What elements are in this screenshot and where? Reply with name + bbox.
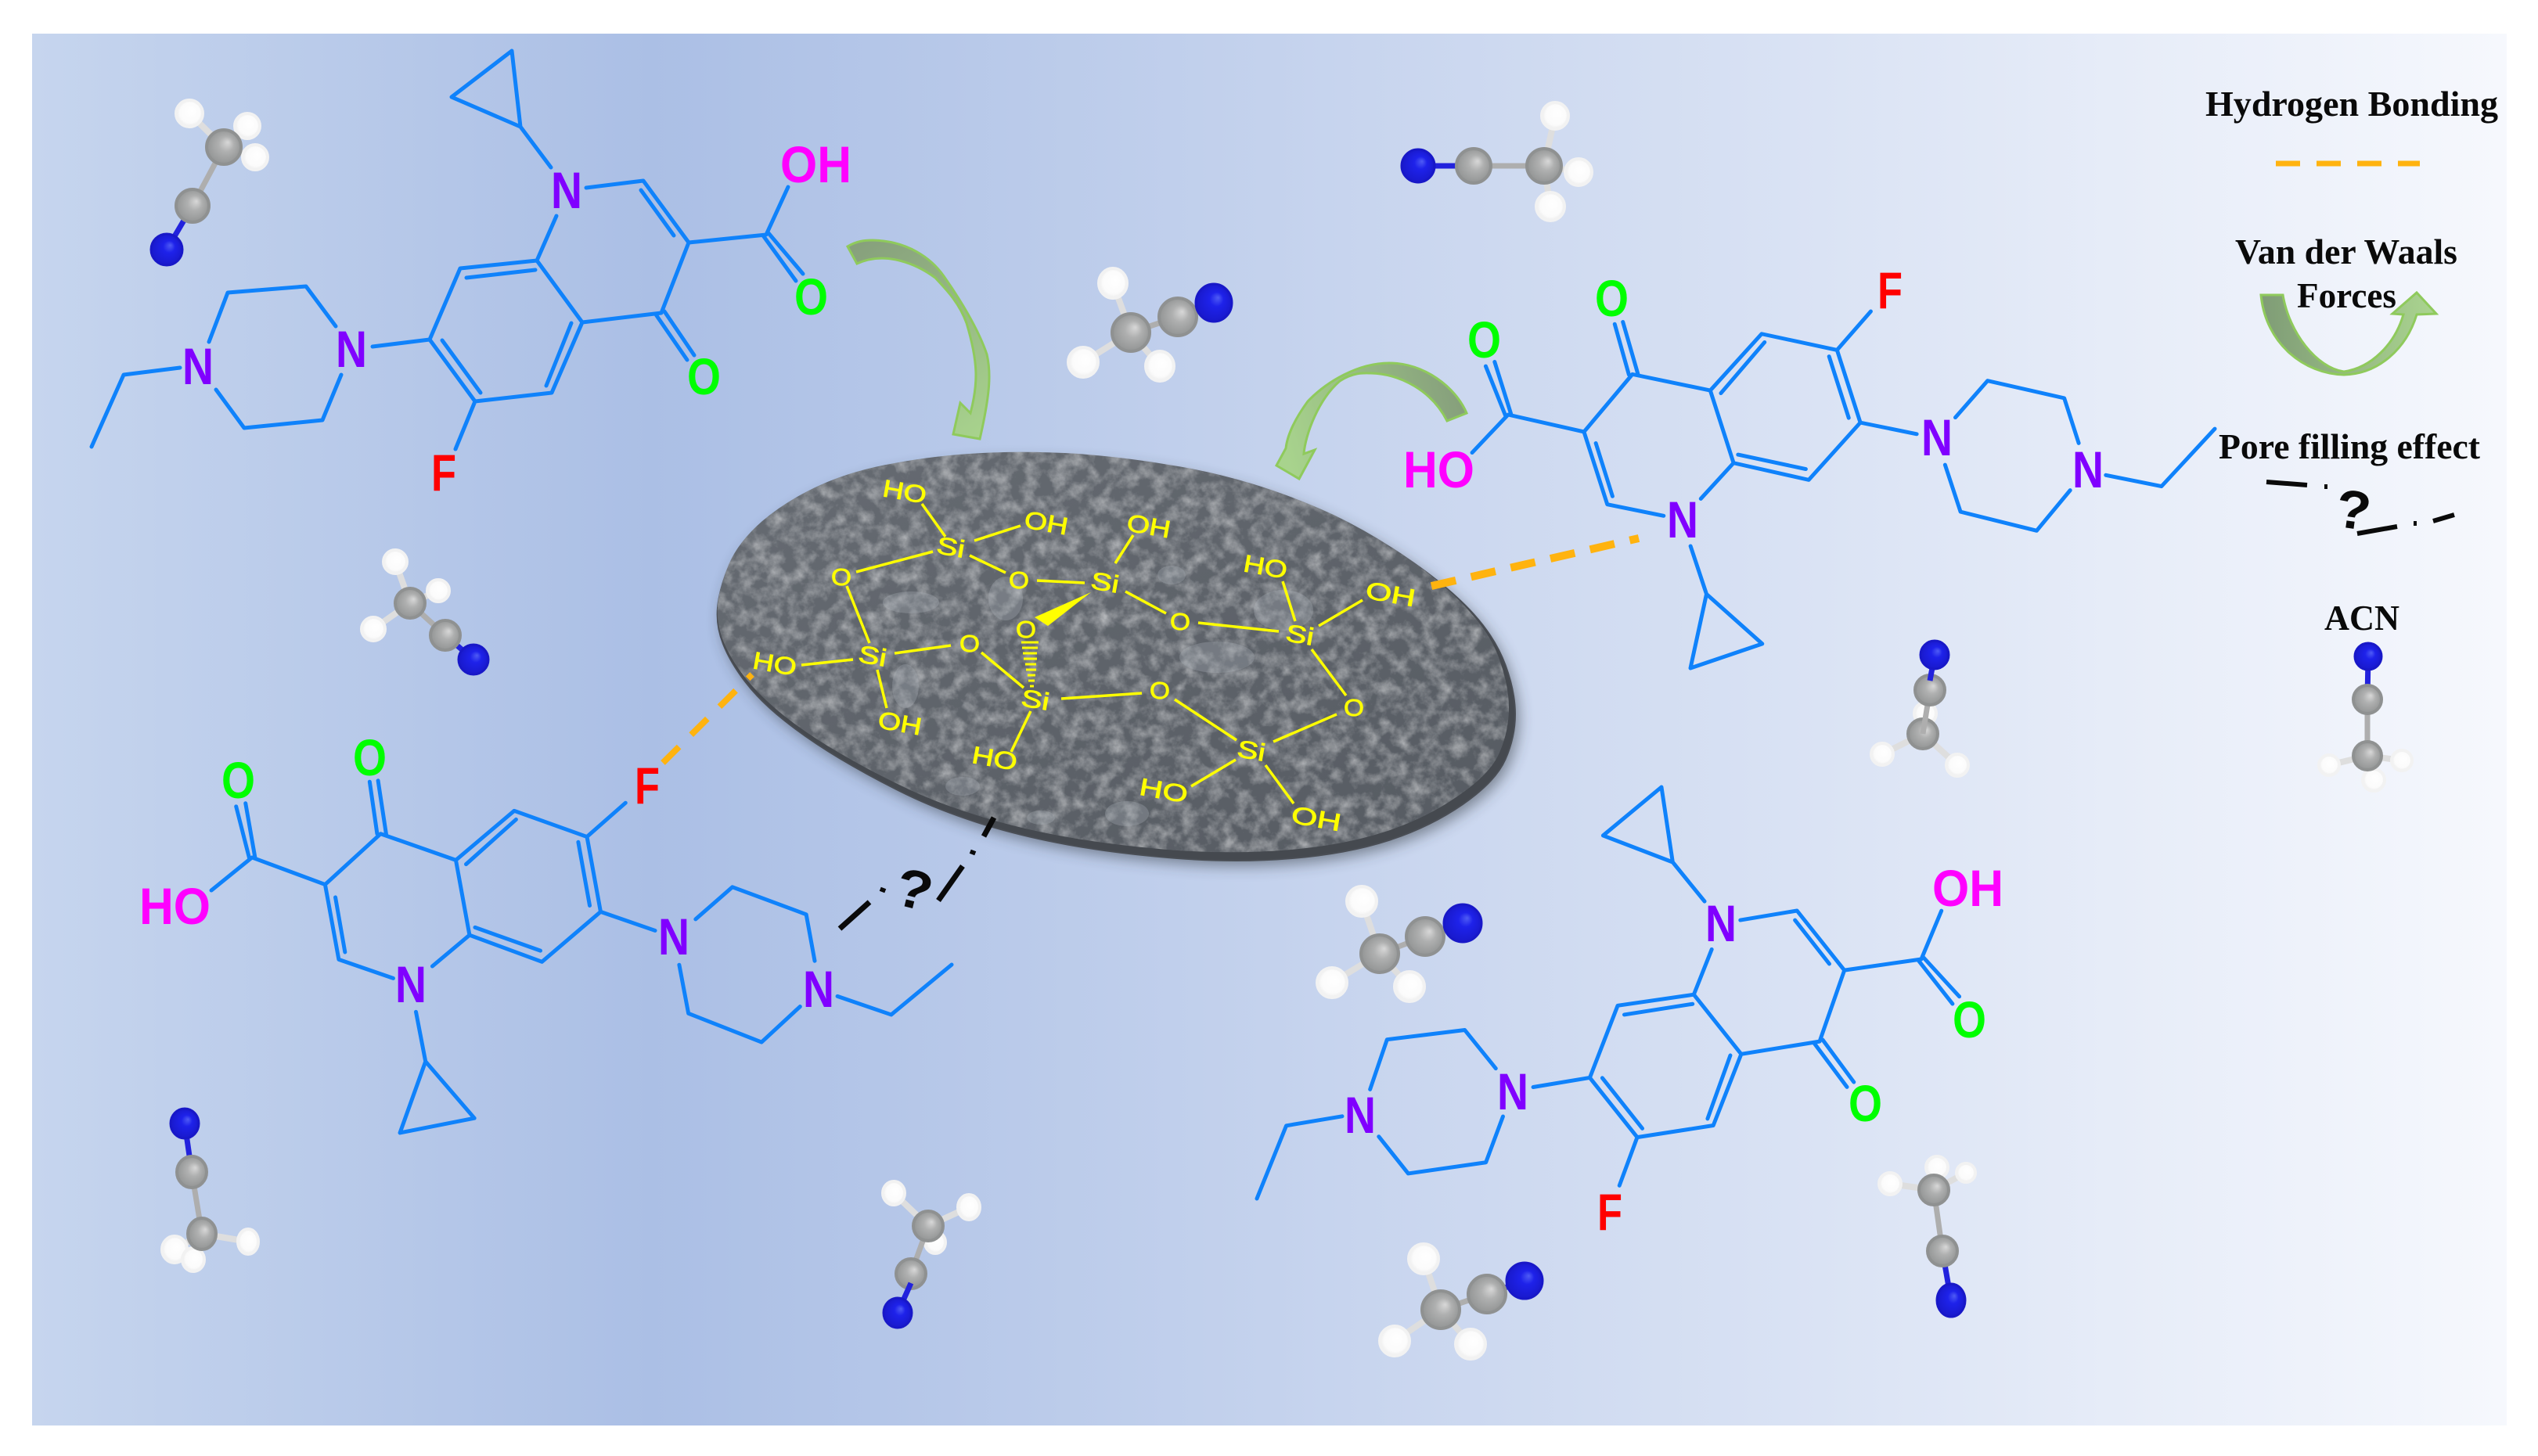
atom labels: N [1705, 894, 1737, 952]
legend sample: ACN molecule [2319, 643, 2412, 791]
ACN molecule 1 [151, 100, 268, 265]
yellow atom labels: Si [1019, 684, 1052, 716]
ACN molecule 10 [883, 1181, 980, 1328]
yellow atom labels: HO [1241, 549, 1290, 584]
yellow atom labels: O [1150, 677, 1170, 704]
bonds [1415, 201, 2216, 801]
legend sample: dash-dot with question mark: ? [2332, 478, 2374, 543]
legend heading: ACN: ACN [2324, 598, 2399, 638]
atom labels [1345, 859, 2003, 1241]
yellow hashed bond [1021, 642, 1039, 686]
ACN molecule 6 [1317, 886, 1481, 1001]
bonds [92, 51, 803, 449]
yellow atom labels: O [831, 563, 851, 591]
molecule: top-right drug [1403, 201, 2216, 801]
atom labels: N [1497, 1062, 1528, 1120]
legend heading: pore filling effect: Pore filling effect [2219, 426, 2481, 466]
legend heading: van der Waals: Van der Waals [2235, 232, 2457, 271]
yellow atom labels: O [959, 630, 980, 657]
atom labels: N [395, 955, 427, 1013]
yellow atom labels: Si [1089, 566, 1121, 599]
ACN molecule 2 [1402, 102, 1592, 221]
atom labels: F [1877, 261, 1903, 319]
atom labels: N [803, 960, 834, 1018]
atom labels: O [353, 728, 387, 786]
legend heading: van der Waals [2235, 232, 2457, 315]
yellow atom labels: OH [1022, 505, 1071, 541]
atom labels: F [635, 757, 660, 814]
question mark: ? [889, 856, 939, 923]
atom labels [1403, 261, 2104, 548]
ACN molecule 5 [1871, 641, 1968, 776]
yellow atom labels: O [1344, 694, 1364, 721]
yellow atom labels: OH [1363, 577, 1417, 612]
yellow atom labels [751, 474, 1417, 836]
yellow atom labels: Si [1283, 619, 1316, 651]
atom labels: N [182, 337, 214, 395]
ACN molecule 3 [1068, 268, 1232, 381]
yellow silanol structure bonds [801, 504, 1363, 803]
ACN molecule 9 [162, 1109, 258, 1271]
atom labels: O [1953, 990, 1986, 1048]
yellow atom labels: Si [1235, 735, 1268, 767]
atom labels: O [1467, 311, 1501, 368]
atom labels: N [1921, 408, 1953, 466]
legend heading: van der Waals: Forces [2297, 275, 2396, 315]
yellow atom labels: OH [1125, 509, 1173, 544]
atom labels: N [551, 161, 582, 219]
ACN molecule 4 [362, 550, 488, 674]
atom labels: N [1667, 491, 1698, 548]
disk rim [718, 455, 1515, 861]
dash-dot segments [840, 818, 994, 929]
yellow atom labels: O [1170, 608, 1190, 635]
hydrogen bond: disk to top-right drug [1431, 538, 1639, 586]
yellow atom labels: HO [970, 741, 1020, 776]
legend sample: green arrow [2261, 293, 2436, 375]
atom labels: N [336, 320, 367, 378]
pore filling effect line on disk [840, 818, 994, 929]
atom labels: O [1849, 1074, 1882, 1132]
bonds [139, 650, 952, 1318]
ACN molecule 8 [1879, 1156, 1975, 1317]
molecule: bottom-left drug [139, 650, 952, 1318]
legend sample: dash-dot with question mark [2266, 478, 2454, 543]
atom labels: O [794, 268, 828, 325]
yellow atom labels: OH [1289, 801, 1343, 836]
atom labels: HO [139, 877, 211, 935]
atom labels: O [221, 751, 255, 809]
ACN molecule 7 [1380, 1244, 1543, 1359]
atom labels: N [2072, 440, 2104, 498]
yellow atom labels: HO [880, 474, 929, 509]
atom labels: N [658, 908, 689, 965]
van der Waals arrow: top-left drug to disk [848, 240, 989, 439]
disk surface [718, 452, 1509, 852]
atom labels: F [431, 444, 456, 502]
silica disk with surface structure [718, 452, 1519, 866]
atom labels: F [1597, 1183, 1622, 1241]
yellow atom labels: HO [751, 646, 799, 681]
legend heading: hydrogen bonding: Hydrogen Bonding [2205, 84, 2498, 124]
atom labels [139, 728, 834, 1018]
yellow atom labels: Si [856, 640, 889, 672]
van der Waals arrow: top-right drug to disk [1276, 363, 1467, 479]
disk drop shadow [722, 461, 1519, 866]
atom labels: OH [780, 135, 851, 193]
molecule: bottom-right drug [1243, 775, 2003, 1241]
atom labels: O [687, 347, 721, 405]
light surface particles [883, 566, 1313, 826]
molecule: top-left drug [92, 51, 851, 502]
atom labels: N [1345, 1086, 1376, 1144]
yellow atom labels: Si [934, 531, 967, 563]
atom labels: HO [1403, 440, 1474, 498]
legend sample: orange dashes [2276, 161, 2420, 166]
atom labels [182, 135, 851, 502]
yellow wedge bond [1035, 592, 1091, 626]
yellow atom labels: O [1009, 566, 1029, 594]
hydrogen bond: disk to bottom-left drug [663, 674, 752, 763]
legend [2205, 84, 2498, 791]
atom labels: O [1595, 269, 1629, 327]
bonds [1243, 775, 1965, 1201]
yellow atom labels: O [1016, 616, 1036, 643]
atom labels: OH [1932, 859, 2003, 917]
yellow atom labels: HO [1137, 773, 1190, 808]
yellow atom labels: OH [876, 706, 924, 741]
